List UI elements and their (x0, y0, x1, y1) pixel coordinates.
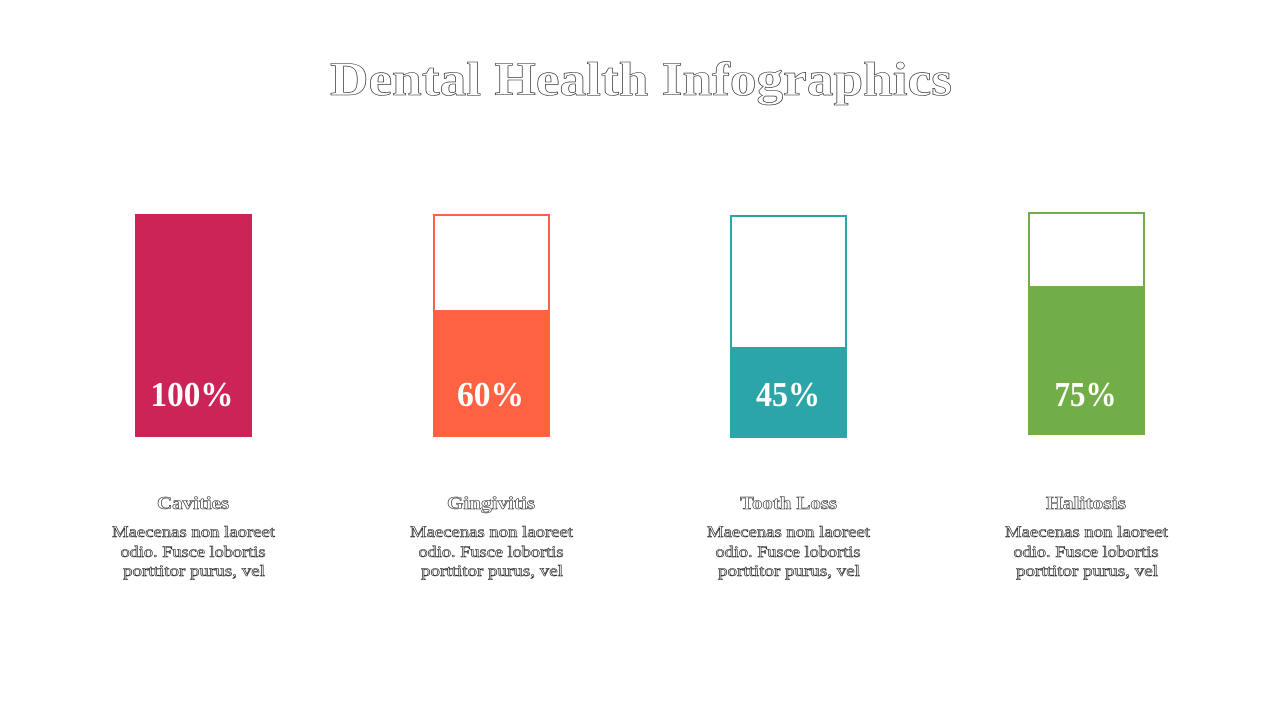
description: cavities: porttitor purus, vel (123, 563, 266, 580)
panel: tooth loss (707, 216, 871, 580)
heading: tooth loss: Tooth Loss (740, 493, 837, 513)
panel: halitosis (1005, 213, 1169, 580)
panel: cavities (112, 214, 276, 580)
description: gingivitis: porttitor purus, vel (421, 563, 564, 580)
description: halitosis: porttitor purus, vel (1016, 563, 1159, 580)
description: cavities: Maecenas non laoreet (112, 524, 276, 541)
heading: gingivitis: Gingivitis (447, 493, 535, 513)
description: tooth loss: porttitor purus, vel (718, 563, 861, 580)
description: tooth loss: odio. Fusce lobortis (716, 544, 860, 561)
description: cavities: odio. Fusce lobortis (120, 544, 266, 561)
description: halitosis: Maecenas non laoreet (1005, 524, 1169, 541)
value: 100%: 100% (150, 375, 234, 414)
title: Dental Health Infographics (330, 53, 952, 106)
description: halitosis (1005, 524, 1169, 580)
bar: cavities 100% (135, 214, 252, 437)
description: tooth loss: Maecenas non laoreet (707, 524, 871, 541)
description: cavities (112, 524, 276, 580)
heading: halitosis: Halitosis (1046, 493, 1126, 513)
description: halitosis: odio. Fusce lobortis (1014, 544, 1158, 561)
description: gingivitis (410, 524, 574, 580)
value: 45%: 45% (756, 375, 820, 414)
description: tooth loss (707, 524, 871, 580)
description: gingivitis: Maecenas non laoreet (410, 524, 574, 541)
heading: cavities: Cavities (157, 493, 229, 513)
bar: gingivitis 60% (433, 215, 550, 437)
bar: halitosis 75% (1028, 213, 1145, 435)
panel: gingivitis (410, 215, 574, 580)
description: gingivitis: odio. Fusce lobortis (418, 544, 564, 561)
value: 75%: 75% (1054, 375, 1116, 414)
bar: tooth loss 45% (730, 216, 847, 438)
value: 60%: 60% (457, 375, 524, 414)
